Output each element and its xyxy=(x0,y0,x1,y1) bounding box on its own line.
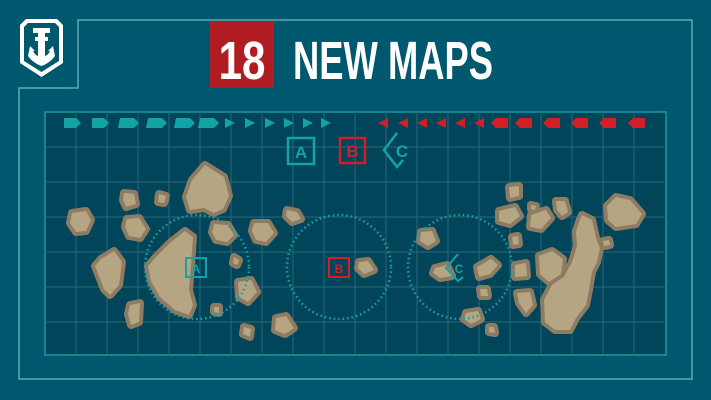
legend A B C: C xyxy=(396,142,408,161)
islands xyxy=(70,165,642,337)
title: NEW MAPS xyxy=(293,31,493,91)
legend A B C: A xyxy=(295,143,307,162)
team arrows: teal xyxy=(64,118,331,128)
title: 18 xyxy=(219,31,265,91)
title xyxy=(210,21,493,91)
logo shield xyxy=(20,19,63,77)
legend A B C xyxy=(288,133,408,167)
capture circles xyxy=(145,215,512,319)
map panel xyxy=(45,112,666,355)
team arrows: red xyxy=(378,118,645,128)
capture markers: C xyxy=(455,262,464,276)
legend A B C: B xyxy=(346,142,359,161)
capture markers: B xyxy=(335,262,344,276)
capture markers xyxy=(186,254,464,281)
capture markers: A xyxy=(192,262,201,276)
